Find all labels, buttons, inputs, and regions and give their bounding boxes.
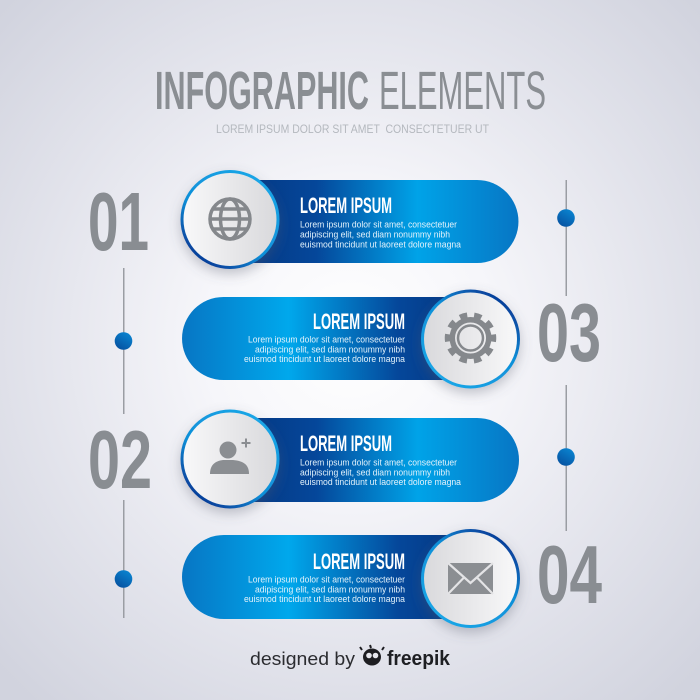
badge 04	[421, 529, 520, 628]
icon: freepik logo	[360, 645, 384, 666]
body text 01: euismod tincidunt ut laoreet dolore magna	[300, 240, 461, 250]
panel: step 03	[182, 290, 520, 388]
body text 04	[244, 574, 405, 604]
body text 03: Lorem ipsum dolor sit amet, consectetuer	[248, 334, 405, 344]
timeline: right upper	[557, 180, 575, 296]
body text 02: Lorem ipsum dolor sit amet, consectetuer	[300, 458, 457, 468]
title: INFOGRAPHIC	[155, 61, 369, 121]
number 02: 02	[88, 413, 152, 506]
body text 03: adipiscing elit, sed diam nonummy nibh	[255, 344, 405, 354]
timeline: left upper	[115, 268, 132, 414]
banner 02	[230, 418, 519, 502]
title: ELEMENTS	[379, 61, 546, 121]
icon: gear	[448, 315, 494, 361]
number 03: 03	[537, 286, 601, 379]
designed by text: designed by	[250, 648, 356, 669]
heading 02: LOREM IPSUM	[300, 431, 392, 456]
badge 02	[180, 410, 280, 508]
subtitle: LOREM IPSUM DOLOR SIT AMET CONSECTETUER UT	[216, 124, 489, 136]
body text 04: euismod tincidunt ut laoreet dolore magna	[244, 594, 405, 604]
freepik wordmark: freepik	[387, 648, 451, 670]
banner 03	[182, 297, 470, 380]
body text 02	[300, 458, 461, 487]
body text 01: Lorem ipsum dolor sit amet, consectetuer	[300, 220, 457, 230]
heading 04: LOREM IPSUM	[313, 549, 405, 574]
heading 01: LOREM IPSUM	[300, 193, 392, 218]
panel: step 01	[180, 170, 518, 269]
icon: globe	[210, 199, 250, 239]
timeline: left lower	[115, 500, 132, 618]
body text 01	[300, 220, 461, 250]
body text 03	[244, 334, 405, 364]
body text 02: adipiscing elit, sed diam nonummy nibh	[300, 468, 450, 478]
badge 01	[180, 170, 280, 269]
number 04: 04	[537, 528, 602, 621]
icon: envelope	[448, 563, 493, 594]
timeline: right lower	[557, 385, 575, 531]
banner 01	[230, 180, 518, 263]
body text 04: Lorem ipsum dolor sit amet, consectetuer	[248, 574, 405, 584]
banner 04	[182, 535, 470, 619]
heading 03: LOREM IPSUM	[313, 309, 405, 334]
body text 02: euismod tincidunt ut laoreet dolore magna	[300, 477, 461, 487]
body text 01: adipiscing elit, sed diam nonummy nibh	[300, 230, 450, 240]
footer credit	[250, 645, 451, 670]
badge 03	[421, 290, 520, 388]
icon: add user	[210, 438, 250, 474]
body text 03: euismod tincidunt ut laoreet dolore magna	[244, 354, 405, 364]
panel: step 04	[182, 529, 520, 628]
body text 04: adipiscing elit, sed diam nonummy nibh	[255, 584, 405, 594]
number 01: 01	[88, 175, 149, 268]
panel: step 02	[180, 410, 519, 508]
